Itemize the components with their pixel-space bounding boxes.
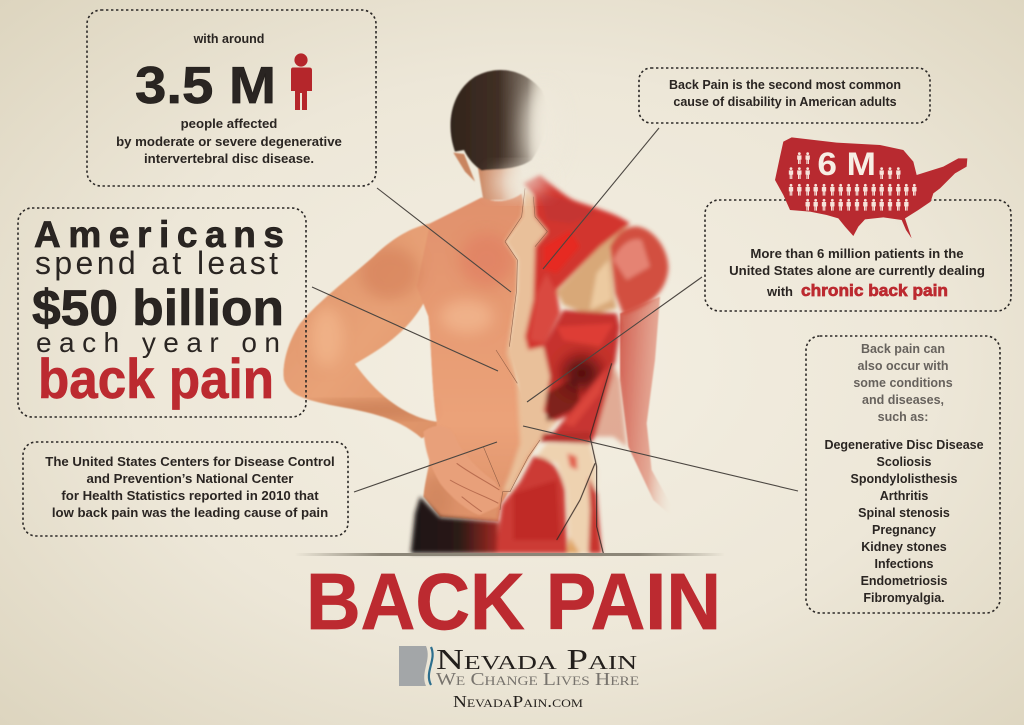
- panel: 6 million patients: United States alone are currently dealing: [729, 263, 985, 278]
- text: with chronic back pain: chronic back pain: [801, 281, 948, 300]
- text: intro: such as:: [878, 410, 928, 424]
- text: spend at least: spend at least: [35, 245, 278, 281]
- list: conditions: Infections: [874, 557, 934, 571]
- list: conditions: Spinal stenosis: [858, 506, 950, 520]
- text: intro: [853, 342, 953, 424]
- text: with around: with around: [193, 32, 264, 46]
- list: conditions: Degenerative Disc Disease: [824, 438, 984, 452]
- text: intro: also occur with: [858, 359, 948, 373]
- panel: $50 billion spend: [18, 208, 306, 417]
- text: with chronic back pain: with: [766, 284, 793, 299]
- text: tagline: We Change Lives Here: [436, 669, 639, 689]
- text: Nevada Pain: Nevada Pain: [436, 645, 637, 676]
- map: United States with people icons: [775, 137, 967, 238]
- panel: second most common cause: cause of disability in American adults: [673, 95, 897, 109]
- text: website: NevadaPain.com: [453, 692, 583, 711]
- list: conditions: Arthritis: [880, 489, 928, 503]
- panel: 6 million patients: More than 6 million patients in the: [750, 246, 964, 261]
- text: intro: and diseases,: [862, 393, 944, 407]
- list: conditions: Kidney stones: [861, 540, 947, 554]
- illustration: man's back with exposed muscles: [283, 70, 683, 553]
- text: back pain: back pain: [38, 347, 274, 410]
- list: conditions: Endometriosis: [861, 574, 947, 588]
- panel: 6 million patients: [705, 200, 1011, 311]
- title: BACK PAIN: [306, 557, 721, 646]
- shadow under figure: [295, 553, 725, 556]
- list: conditions: Scoliosis: [877, 455, 931, 469]
- panel: second most common cause: Back Pain is the second most common: [669, 78, 901, 92]
- panel: CDC statistic: and Prevention’s National Center: [87, 471, 293, 486]
- panel: CDC statistic: [23, 442, 348, 536]
- logo: Nevada Pain: [399, 645, 639, 711]
- list: conditions: Fibromyalgia.: [863, 591, 945, 605]
- text: affected description: by moderate or severe degenerative: [116, 134, 342, 149]
- text: each year on: each year on: [36, 327, 280, 358]
- text: intro: Back pain can: [861, 342, 945, 356]
- text: Americans: Americans: [34, 214, 284, 255]
- text: intro: some conditions: [853, 376, 953, 390]
- list: conditions: Pregnancy: [872, 523, 936, 537]
- stat: $50 billion: $50 billion: [32, 280, 284, 336]
- list: conditions: Spondylolisthesis: [851, 472, 958, 486]
- panel: 3.5 million affected: [87, 10, 376, 186]
- map: United States with people icons: 6 M: [817, 146, 876, 182]
- panel: CDC statistic: The United States Centers for Disease Control: [45, 454, 335, 469]
- text: affected description: [116, 116, 342, 166]
- panel: related conditions: [806, 336, 1000, 613]
- stat: 3.5 M: 3.5 M: [135, 57, 276, 115]
- panel: second most common cause: [639, 68, 930, 123]
- pointer lines: [312, 128, 798, 492]
- text: affected description: people affected: [181, 116, 277, 131]
- text: affected description: intervertebral disc disease.: [144, 151, 314, 166]
- panel: CDC statistic: low back pain was the leading cause of pain: [52, 505, 328, 520]
- icon: spine mark: [399, 646, 433, 686]
- icon: person: [291, 53, 312, 110]
- panel: CDC statistic: for Health Statistics reported in 2010 that: [61, 488, 319, 503]
- list: conditions: [824, 438, 984, 605]
